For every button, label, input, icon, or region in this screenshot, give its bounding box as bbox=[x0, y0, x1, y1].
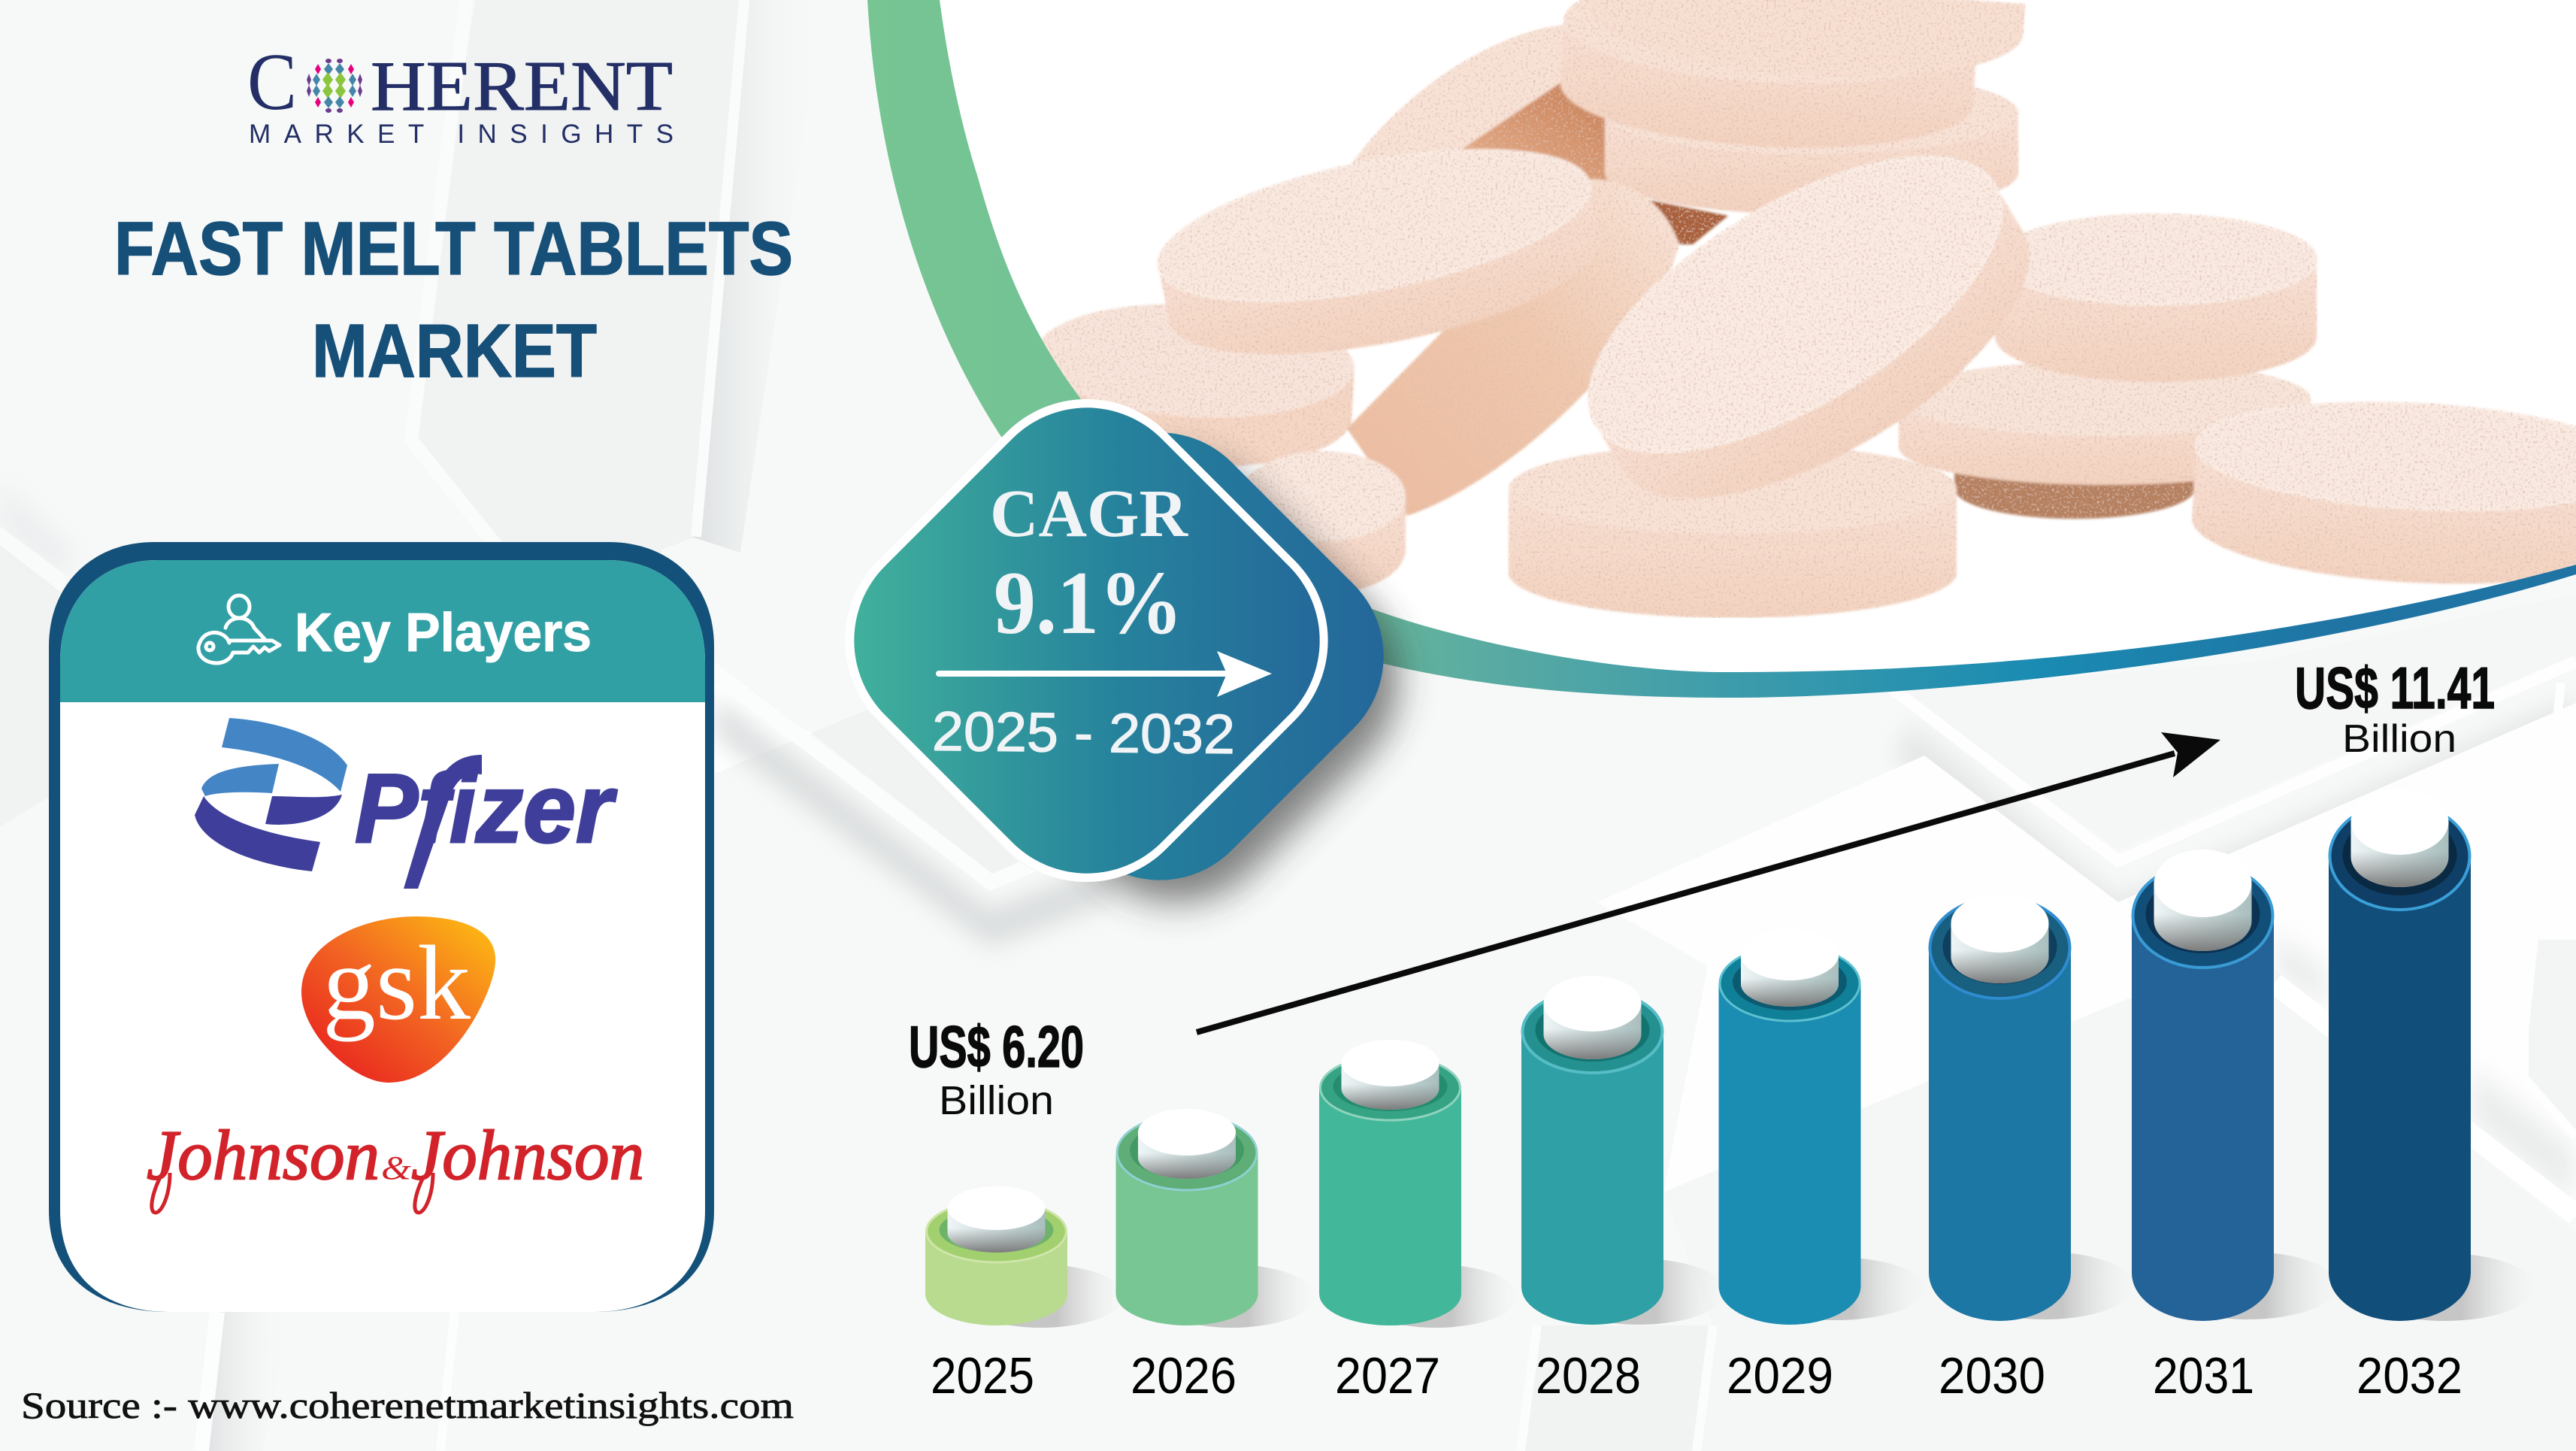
year labels: 2031 bbox=[2153, 1347, 2254, 1404]
panel header band bbox=[60, 560, 705, 702]
value label 2032: US$ 11.41 bbox=[2295, 655, 2495, 721]
source line: Source :- www.coherenetmarketinsights.com bbox=[21, 1384, 794, 1426]
panel header band: Key Players bbox=[295, 603, 592, 663]
bar 2025 bbox=[925, 1186, 1067, 1325]
logo: Coherent Market Insights: HERENT bbox=[371, 47, 673, 126]
logo: Pfizer bbox=[195, 718, 617, 889]
title: MARKET bbox=[312, 309, 597, 393]
logo: Johnson & Johnson bbox=[147, 1116, 644, 1213]
bar 2028 bbox=[1521, 976, 1663, 1325]
year labels: 2027 bbox=[1335, 1347, 1440, 1404]
value label 2032 bbox=[2295, 655, 2495, 761]
value label 2025: US$ 6.20 bbox=[909, 1013, 1084, 1080]
white image area bbox=[940, 0, 2576, 672]
value label 2032: Billion bbox=[2342, 717, 2456, 761]
badge shadow bbox=[910, 414, 1442, 947]
icon: logo globe bbox=[307, 59, 362, 113]
bar chart bbox=[925, 789, 2535, 1404]
logo: Johnson & Johnson: & bbox=[381, 1150, 412, 1186]
CAGR badge bbox=[798, 353, 1442, 947]
logo: Coherent Market Insights: C bbox=[247, 38, 297, 127]
bar 2027 bbox=[1319, 1040, 1461, 1325]
bar 2029 bbox=[1718, 929, 1861, 1325]
curved band bbox=[867, 0, 2576, 698]
logo: GSK: gsk bbox=[322, 923, 471, 1042]
panel: key players bbox=[49, 542, 714, 1312]
growth arrow bbox=[1197, 732, 2220, 1032]
title: FAST MELT TABLETS bbox=[114, 207, 793, 291]
arrow: CAGR period bbox=[936, 651, 1272, 697]
tablets photo bbox=[1031, 0, 2576, 618]
year labels: 2029 bbox=[1727, 1347, 1833, 1404]
logo: Coherent Market Insights bbox=[247, 38, 674, 149]
bar 2030 bbox=[1929, 894, 2071, 1321]
CAGR badge: 9.1% bbox=[994, 553, 1183, 653]
icon: person with key bbox=[198, 595, 280, 663]
value label 2025 bbox=[909, 1013, 1084, 1123]
title bbox=[114, 207, 793, 393]
logo: Johnson & Johnson: Johnson bbox=[147, 1116, 380, 1195]
bar 2032 bbox=[2329, 789, 2471, 1321]
year labels: 2028 bbox=[1536, 1347, 1641, 1404]
logo: Pfizer: Pfizer bbox=[355, 753, 617, 863]
bar 2026 bbox=[1115, 1109, 1258, 1325]
logo: Coherent Market Insights: MARKET INSIGHTS bbox=[249, 120, 674, 149]
bar shadows bbox=[958, 1252, 2535, 1328]
year labels bbox=[931, 1347, 2462, 1404]
value label 2025: Billion bbox=[939, 1078, 1054, 1123]
logo: Johnson & Johnson: Johnson bbox=[411, 1116, 644, 1195]
logo: GSK bbox=[301, 916, 495, 1083]
bar 2031 bbox=[2132, 850, 2274, 1321]
year labels: 2026 bbox=[1131, 1347, 1237, 1404]
year labels: 2030 bbox=[1939, 1347, 2045, 1404]
CAGR badge: CAGR bbox=[990, 477, 1188, 551]
year labels: 2025 bbox=[931, 1347, 1034, 1404]
year labels: 2032 bbox=[2357, 1347, 2462, 1404]
CAGR badge: 2025 - 2032 bbox=[932, 700, 1235, 765]
